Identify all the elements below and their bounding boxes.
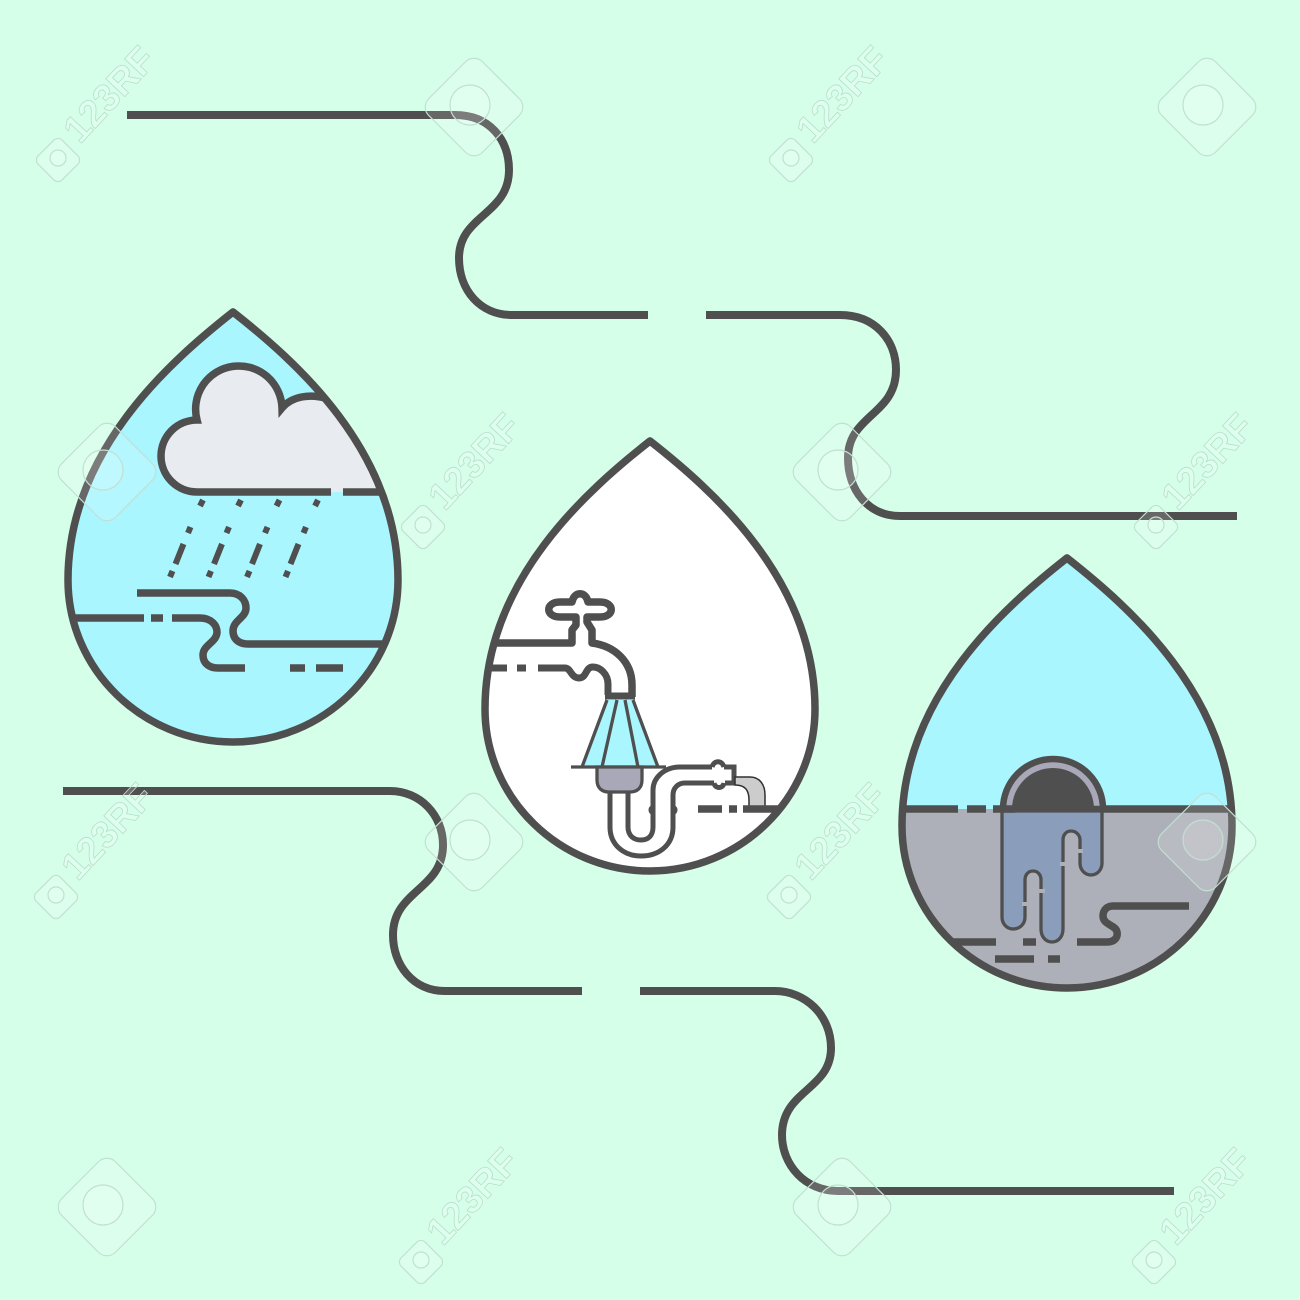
drop: faucet and sink trap: [485, 441, 815, 871]
watermark text: 123RF: [419, 1141, 527, 1253]
icon: sewer dome: [1003, 759, 1103, 809]
drop outline: [68, 312, 398, 742]
icon: gray wall pipe: [735, 777, 765, 807]
icon: cloud: [161, 366, 400, 492]
drop: sewer outlet: [895, 558, 1240, 994]
icon: water stream: [582, 700, 658, 767]
watermark text: 123RF: [1154, 406, 1262, 518]
icon: P-trap pipe: [610, 762, 734, 856]
ground lines: [900, 809, 1240, 959]
watermark text: 123RF: [1152, 1141, 1260, 1253]
drop outline: [902, 558, 1232, 988]
top winding pipe line: [127, 115, 1237, 516]
icon: rain: [170, 500, 318, 577]
drop: rain and river: [68, 312, 400, 742]
bottom winding pipe line: [63, 791, 1174, 1191]
icon: faucet: [490, 594, 635, 697]
watermark text: 123RF: [56, 39, 164, 151]
watermark text: 123RF: [789, 39, 897, 151]
ground fill: [906, 809, 1228, 984]
icon: river: [70, 593, 390, 668]
icon: drain cap: [597, 767, 642, 792]
watermark text: 123RF: [54, 776, 162, 888]
watermark text: 123RF: [421, 406, 529, 518]
icon: sink rim: [571, 765, 666, 769]
drop outline: [485, 441, 815, 871]
watermark text: 123RF: [787, 776, 895, 888]
wall line: [698, 805, 785, 813]
icon: sewage drips: [1002, 811, 1102, 942]
